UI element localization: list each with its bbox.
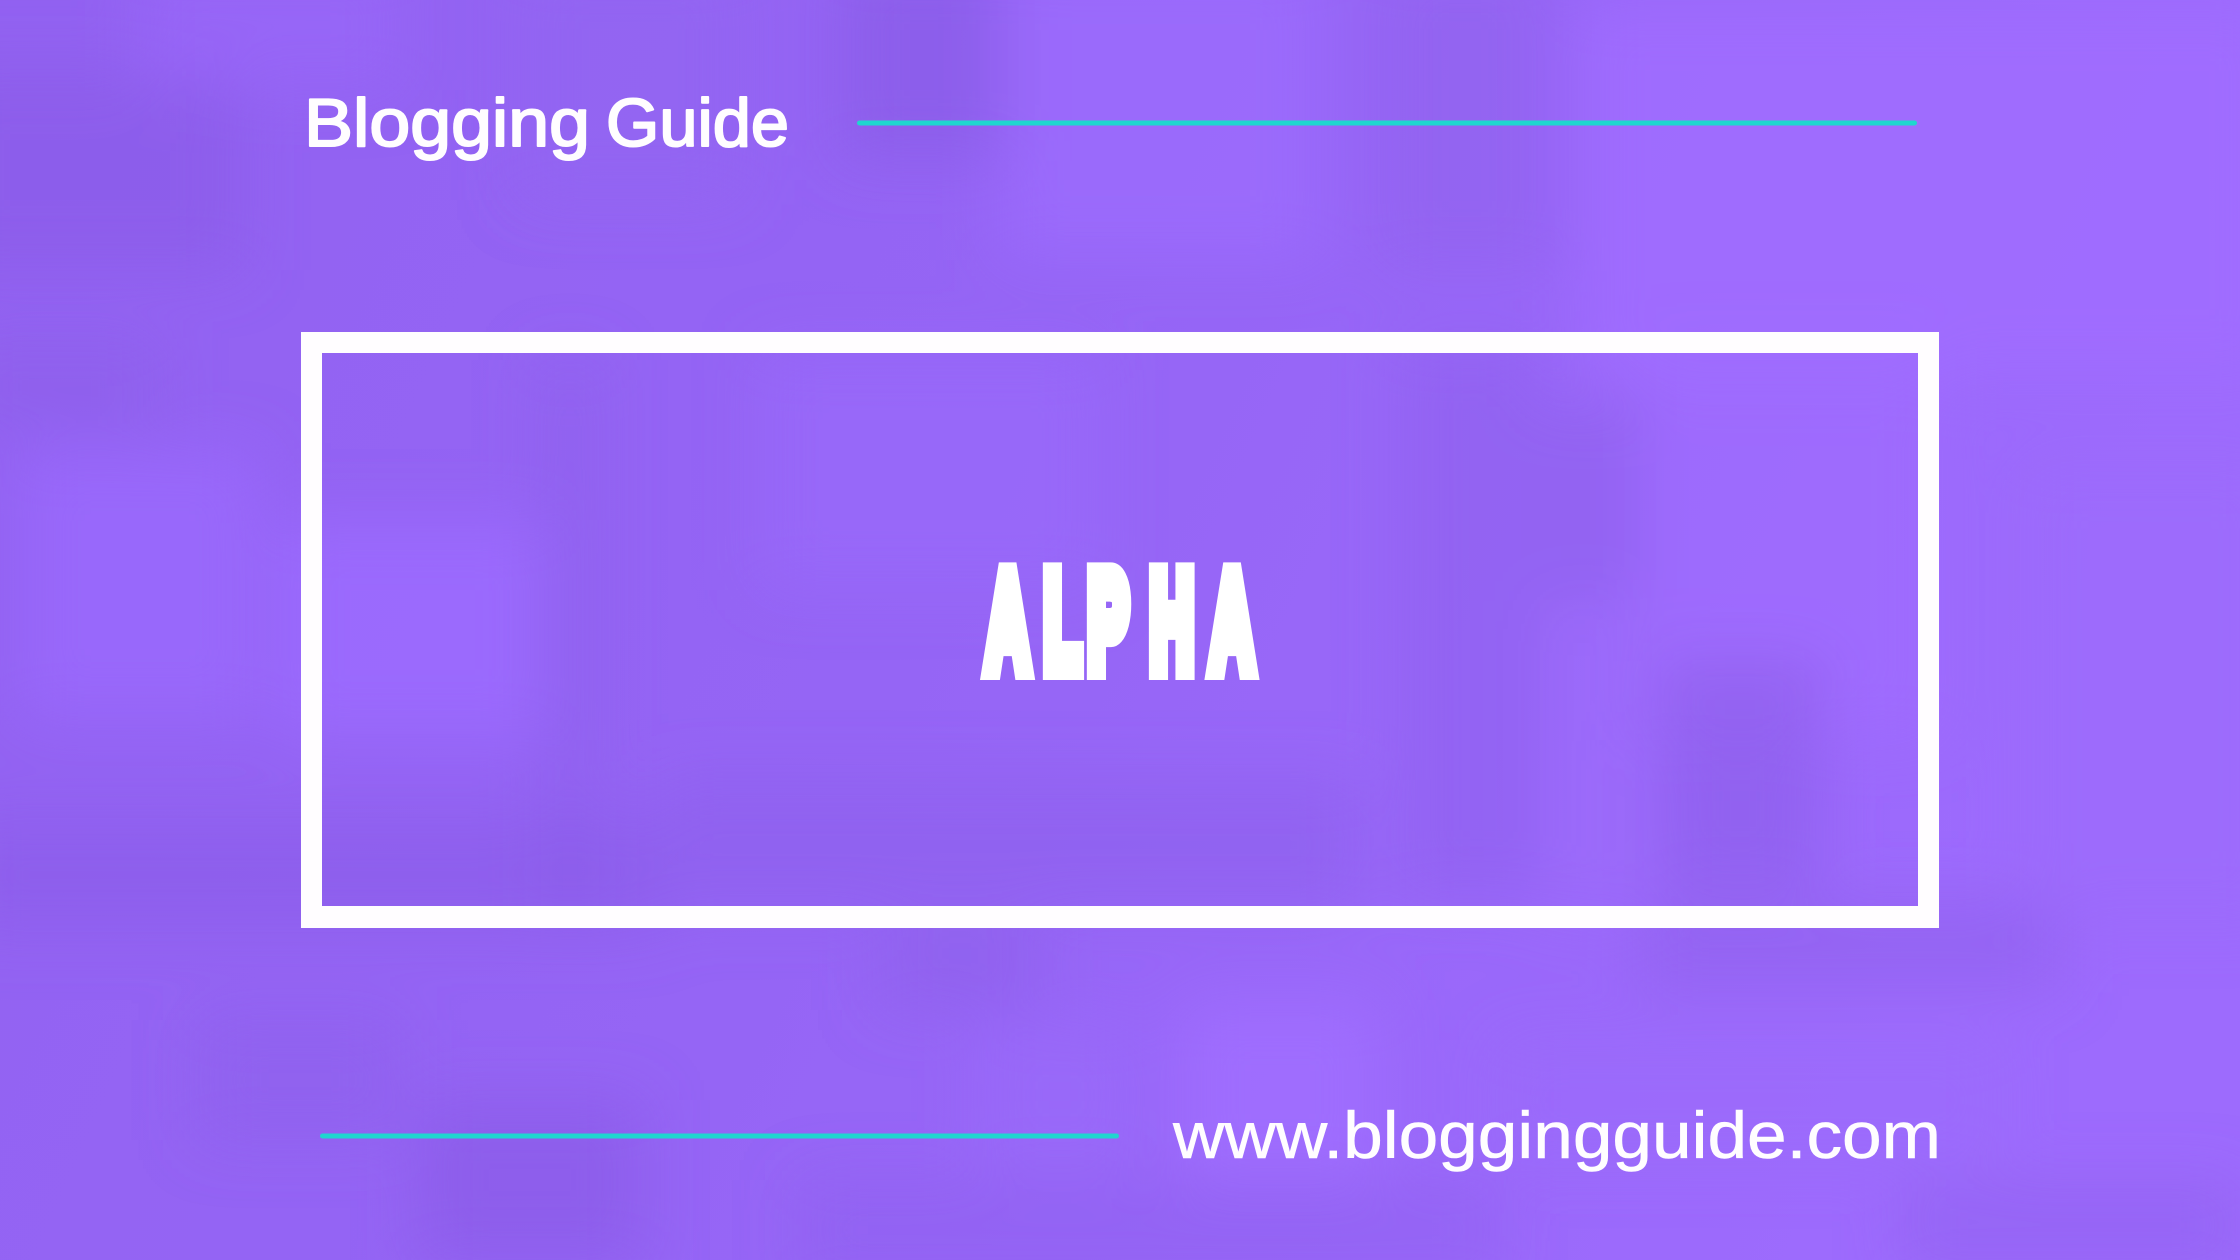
heading: Blogging Guide [304, 85, 789, 161]
heading: Blogging Guide: Blogging [304, 85, 590, 161]
heading: Blogging Guide: Guide [606, 85, 789, 161]
title: ALPHA: ALPHA [986, 546, 1254, 698]
top teal rule [857, 120, 1917, 126]
white frame panel [301, 332, 1939, 928]
website URL: www.bloggingguide.com [1172, 1098, 1941, 1172]
bottom teal rule [320, 1134, 1119, 1138]
